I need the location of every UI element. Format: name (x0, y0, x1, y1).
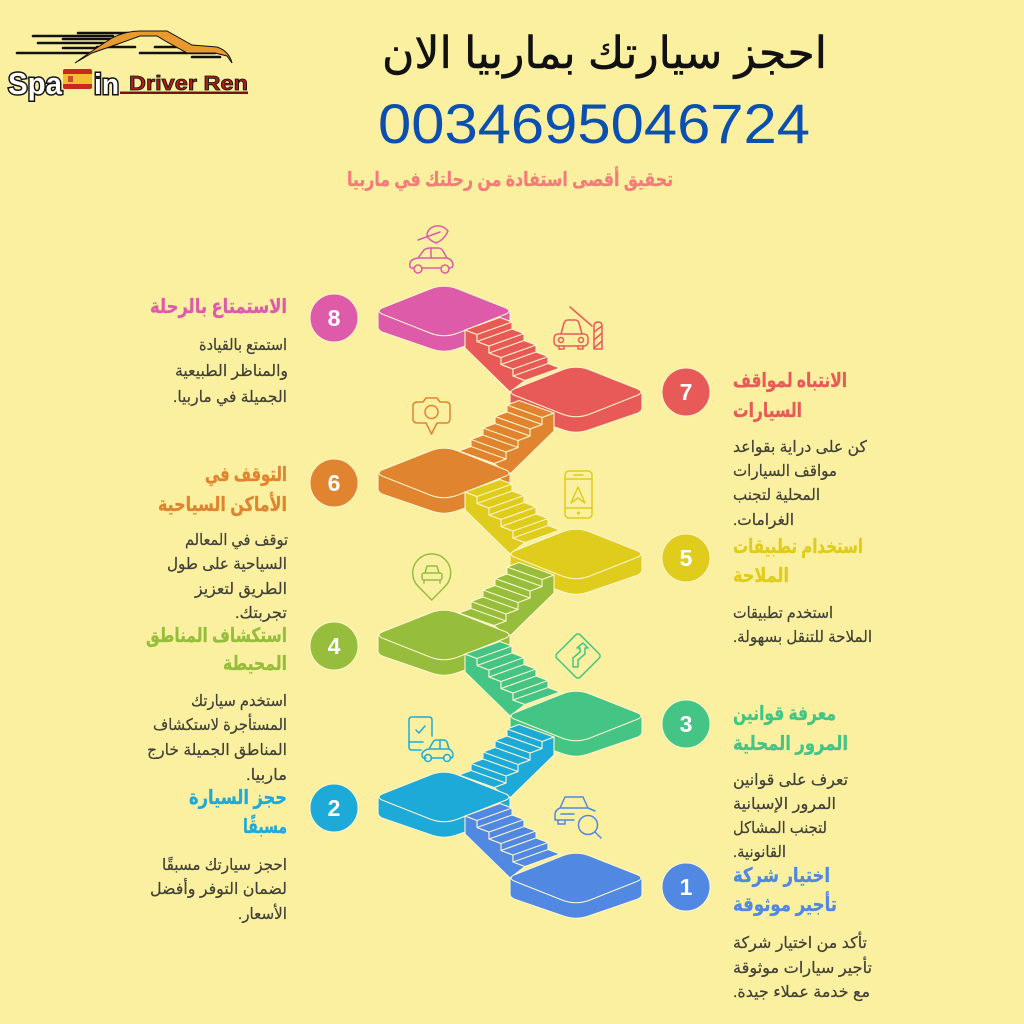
stairs 8 to 7 (465, 318, 560, 392)
phone number: 0034695046724 (378, 93, 810, 155)
platform 1 (510, 853, 642, 918)
step 3 heading: المرور المحلية (733, 733, 848, 755)
step 2 heading: مسبقًا (243, 814, 287, 838)
step 4 body: استخدم سيارتك (191, 693, 287, 711)
step 4 heading: استكشاف المناطق (146, 625, 287, 647)
step 5 body (733, 605, 872, 647)
icon: car with leaf (410, 226, 453, 273)
step 3 badge: 3 (680, 711, 692, 737)
step 7 body (733, 439, 867, 530)
step 6 heading: التوقف في (205, 464, 287, 487)
step 1 text (733, 865, 872, 1002)
step 1 badge (662, 863, 710, 911)
platform 6 (378, 448, 510, 513)
step 2 text (150, 787, 287, 924)
stairs 6 to 5 (465, 480, 560, 554)
title: احجز سيارتك بماربيا الان (382, 29, 827, 79)
step 5 badge (662, 534, 710, 582)
step 5 text (733, 536, 872, 647)
logo speed streaks (17, 33, 220, 57)
step 3 heading (733, 703, 848, 755)
step 1 body: تأجير سيارات موثوقة (733, 956, 872, 978)
step 3 body (733, 772, 848, 862)
step 4 badge (310, 622, 358, 670)
step 3 body: المرور الإسبانية (733, 796, 836, 814)
step 8 badge (310, 294, 358, 342)
step 3 badge (662, 700, 710, 748)
icon: phone navigation (565, 471, 592, 518)
step 4 heading: المحيطة (223, 653, 287, 675)
step 3 body: القانونية. (733, 844, 786, 862)
step 7 badge: 7 (680, 379, 692, 405)
stairs 3 to 2 (459, 724, 554, 799)
step 4 body: المناطق الجميلة خارج (147, 742, 287, 760)
step 6 badge (310, 459, 358, 507)
step 3 body: تعرف على قوانين (733, 772, 848, 790)
logo word: in: in (94, 69, 119, 101)
step 6 body: تجربتك. (235, 605, 287, 623)
step 6 body (167, 532, 288, 623)
step 3 body: لتجنب المشاكل (733, 820, 827, 837)
step 2 heading (189, 787, 287, 838)
step 8 body (173, 337, 288, 407)
step 1 heading: تأجير موثوقة (733, 890, 837, 916)
platform 3 (510, 691, 642, 756)
staircase illustration (378, 286, 642, 918)
icon: car with magnifier (555, 797, 601, 838)
step 1 heading (733, 865, 837, 916)
step 2 body: احجز سيارتك مسبقًا (162, 856, 287, 875)
step 4 heading (146, 625, 287, 675)
step 7 body: المحلية لتجنب (733, 487, 820, 504)
step 8 body: والمناظر الطبيعية (175, 363, 288, 381)
step 5 body: استخدم تطبيقات (733, 605, 833, 622)
step 4 body: ماربيا. (246, 767, 287, 785)
logo car swoosh (75, 31, 232, 63)
step 6 body: الطريق لتعزيز (194, 581, 287, 599)
platform 2 (378, 772, 510, 837)
stairs 2 to 1 (465, 804, 560, 878)
step 1 body: مع خدمة عملاء جيدة. (733, 984, 870, 1002)
icon: phone booking with car (409, 717, 453, 762)
logo word: Spa: Spa (8, 66, 63, 101)
stairs 5 to 4 (459, 562, 554, 637)
step 4 body: المستأجرة لاستكشاف (153, 713, 287, 735)
step 5 heading: استخدام تطبيقات (733, 536, 863, 558)
step 5 heading: الملاحة (733, 565, 789, 587)
step 8 heading: الاستمتاع بالرحلة (150, 296, 287, 318)
step 2 badge: 2 (328, 795, 340, 821)
step 6 heading: الأماكن السياحية (158, 491, 287, 516)
icon: winding road sign (555, 633, 601, 679)
step 7 body: كن على دراية بقواعد (733, 439, 867, 457)
platform 7 (510, 367, 642, 432)
logo underline (120, 92, 248, 94)
step 1 body (733, 931, 872, 1002)
step 2 body (150, 856, 287, 924)
step 6 body: السياحية على طول (167, 556, 287, 574)
step 2 body: لضمان التوفر وأفضل (150, 878, 287, 899)
step 8 badge: 8 (328, 305, 341, 331)
step 7 heading (733, 370, 847, 422)
step 4 badge: 4 (328, 633, 341, 659)
step 3 text (733, 703, 848, 862)
step 2 badge (310, 784, 358, 832)
icon: car at parking barrier (554, 307, 602, 349)
step 5 heading (733, 536, 863, 587)
icon: car location pin (413, 554, 451, 600)
step 6 badge: 6 (328, 470, 340, 496)
step 1 body: تأكد من اختيار شركة (733, 931, 867, 953)
stairs 4 to 3 (465, 642, 560, 716)
step 1 heading: اختيار شركة (733, 865, 830, 887)
platform 5 (510, 529, 642, 594)
step 5 badge: 5 (680, 545, 693, 571)
step 6 body: توقف في المعالم (185, 532, 288, 550)
step 4 text (146, 625, 287, 785)
step 8 body: استمتع بالقيادة (199, 337, 287, 355)
step 7 badge (662, 368, 710, 416)
step 7 body: الغرامات. (733, 512, 794, 530)
step 4 body (147, 693, 287, 785)
logo flag of Spain (63, 69, 92, 89)
step 6 text (158, 464, 288, 623)
step 7 text (733, 370, 867, 530)
step 8 body: الجميلة في ماربيا. (173, 389, 287, 407)
stairs 7 to 6 (459, 400, 554, 475)
logo: Spain Driver Rent (8, 31, 248, 101)
logo word: Driver Ren: Driver Ren (129, 73, 248, 95)
step 1 badge: 1 (680, 874, 693, 900)
subtitle: تحقيق أقصى استفادة من رحلتك في ماربيا (347, 165, 673, 192)
step 7 heading: الانتباه لمواقف (733, 370, 847, 392)
step 2 body: الأسعار. (238, 903, 287, 924)
icon: camera location pin (413, 398, 450, 434)
platform 4 (378, 610, 510, 675)
step 6 heading (158, 464, 287, 516)
step 7 body: مواقف السيارات (733, 463, 837, 481)
step 7 heading: السيارات (733, 400, 802, 422)
step 3 heading: معرفة قوانين (733, 703, 836, 725)
step 5 body: الملاحة للتنقل بسهولة. (733, 629, 872, 647)
platform 8 (378, 286, 510, 351)
step 2 heading: حجز السيارة (189, 787, 287, 809)
step 8 text (150, 296, 288, 407)
